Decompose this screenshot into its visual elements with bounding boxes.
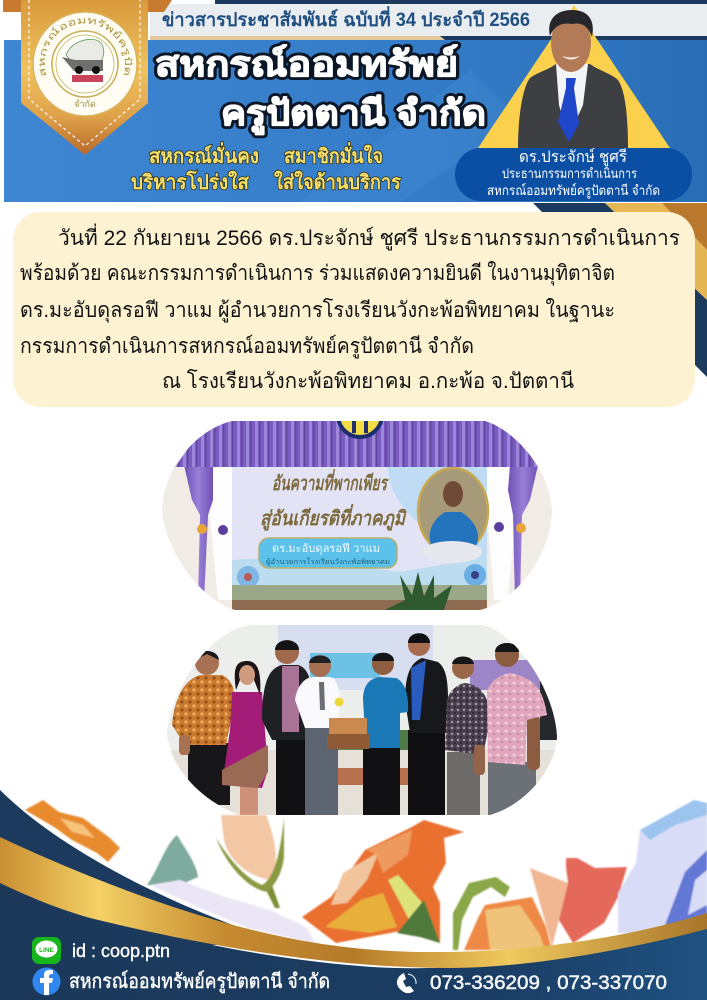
organisation: สหกรณ์ออมทรัพย์ครูปัตตานี จำกัด xyxy=(487,182,660,199)
name plate: ผู้อำนวยการโรงเรียนวังกะพ้อพิทยาคม xyxy=(266,557,390,566)
seal hill xyxy=(66,39,104,62)
name plate: ดร.มะอับดุลรอฟี วาแม xyxy=(272,542,380,555)
purple drapes xyxy=(184,465,538,600)
president name: ดร.ประจักษ์ ชูศรี xyxy=(519,147,627,167)
flower: peach bud xyxy=(216,815,284,908)
flower: white bloom xyxy=(150,880,316,944)
banner flowers xyxy=(237,564,486,585)
shirt xyxy=(556,64,588,138)
person 3 xyxy=(262,640,312,815)
newsletter heading: ข่าวสารประชาสัมพันธ์ ฉบับที่ 34 ประจำปี 2566 xyxy=(162,6,530,31)
president role: ประธานกรรมการดำเนินการ xyxy=(502,166,637,181)
tagline left 2: บริหารโปร่งใส xyxy=(131,170,250,194)
gift basket xyxy=(327,698,369,749)
tagline right 1: สมาชิกมั่นใจ xyxy=(284,141,383,168)
top navy strip xyxy=(215,0,707,5)
LINE id: id : coop.ptn xyxy=(72,941,170,961)
flower: large orange xyxy=(302,820,464,943)
person 2 xyxy=(222,661,268,815)
footer swoosh navy upper xyxy=(0,790,290,945)
lower right stripes xyxy=(533,203,707,377)
seal base xyxy=(72,75,103,82)
seal bottom text: จำกัด xyxy=(74,99,96,109)
person 1 xyxy=(172,651,235,805)
person 7 xyxy=(445,656,490,815)
flowers xyxy=(25,800,707,950)
line 1: วันที่ 22 กันยายน 2566 ดร.ประจักษ์ ชูศรี ประธานกรรมการดำเนินการ xyxy=(58,223,680,251)
title line 1: สหกรณ์ออมทรัพย์ xyxy=(155,44,458,84)
blue band xyxy=(4,40,707,202)
plants and planter xyxy=(338,730,408,785)
panel: announcement xyxy=(13,212,695,407)
name pill xyxy=(455,147,692,201)
tie xyxy=(558,78,579,142)
icon: Facebook xyxy=(32,968,60,996)
smile xyxy=(562,56,580,60)
newsletter strip xyxy=(150,4,707,36)
ribbon badge xyxy=(21,0,148,155)
tagline left 1: สหกรณ์มั่นคง xyxy=(149,141,259,168)
name plate xyxy=(259,538,397,568)
flower: blue hydrangea xyxy=(618,800,707,933)
floor xyxy=(167,750,557,815)
footer gold wave xyxy=(0,837,707,968)
line 3: ดร.มะอับดุลรอฟี วาแม ผู้อำนวยการโรงเรียนวังกะพ้อพิทยาคม ในฐานะ xyxy=(20,298,615,323)
navy rule xyxy=(440,36,707,40)
backdrop panel xyxy=(310,653,380,678)
leaf: teal xyxy=(147,835,198,886)
line 5: ณ โรงเรียนวังกะพ้อพิทยาคม อ.กะพ้อ จ.ปัตตานี xyxy=(162,369,574,393)
portrait xyxy=(518,10,628,148)
title line 1: สหกรณ์ออมทรัพย์ xyxy=(155,44,458,84)
person 4 xyxy=(295,655,340,815)
gold streak xyxy=(150,36,445,40)
plant xyxy=(385,572,452,610)
diagonal band highlights xyxy=(300,70,520,202)
banner blue flowers xyxy=(388,467,487,560)
neck and face xyxy=(551,14,591,72)
line 2: พร้อมด้วย คณะกรรมการดำเนินการ ร่วมแสดงความยินดี ในงานมุทิตาจิต xyxy=(20,261,615,286)
ribbon folds xyxy=(3,0,172,12)
person 6 xyxy=(405,633,448,815)
back table right xyxy=(470,660,545,690)
cooperative seal xyxy=(32,11,138,117)
white side drapes xyxy=(205,467,520,600)
photo: stage backdrop xyxy=(162,421,552,610)
drape ties xyxy=(197,522,526,535)
banner flower strip xyxy=(232,585,487,600)
gold triangle xyxy=(478,5,670,148)
banner meadow xyxy=(232,558,487,585)
flower: orange rose xyxy=(25,800,120,862)
photo: group handover xyxy=(167,625,557,815)
telephone numbers: 073-336209 , 073-337070 xyxy=(430,973,667,994)
heading 1: อันความที่พากเพียร xyxy=(272,469,389,495)
portrait frame xyxy=(418,468,488,563)
Facebook page name: สหกรณ์ออมทรัพย์ครูปัตตานี จำกัด xyxy=(69,970,330,994)
title line 2: ครูปัตตานี จำกัด xyxy=(221,94,486,135)
header banner xyxy=(3,0,707,377)
person 5 xyxy=(363,653,408,815)
line 4: กรรมการดำเนินการสหกรณ์ออมทรัพย์ครูปัตตานี จำกัด xyxy=(20,334,474,359)
footer navy lower xyxy=(0,883,707,1000)
valance xyxy=(175,421,540,467)
icon: telephone xyxy=(397,973,416,993)
hair xyxy=(549,10,593,37)
icon: LINE xyxy=(32,937,61,964)
title line 2: ครูปัตตานี จำกัด xyxy=(221,94,486,135)
stem: green curl xyxy=(453,877,510,950)
icon: LINE: LINE xyxy=(39,947,55,954)
banner xyxy=(232,467,488,600)
floor xyxy=(232,600,487,610)
backdrop banner xyxy=(278,625,433,690)
heading 2: สู่อันเกียรติที่ภาคภูมิ xyxy=(260,504,407,531)
suit xyxy=(518,64,628,148)
ribbon stitching xyxy=(29,0,140,146)
school emblem xyxy=(336,421,384,439)
seal cannon xyxy=(62,57,103,71)
person 8 xyxy=(487,643,547,815)
tagline right 2: ใส่ใจด้านบริการ xyxy=(274,170,401,194)
flower: red petals xyxy=(464,858,627,950)
right bystander xyxy=(540,680,557,740)
